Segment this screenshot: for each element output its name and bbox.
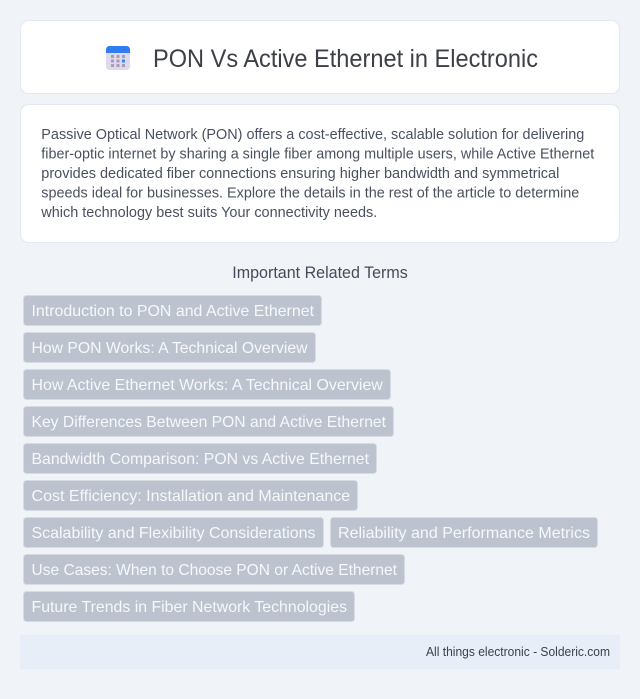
text block: introduction paragraph: Passive Optical Network (PON) offers a cost-effective, scalable solution for delivering bbox=[41, 127, 584, 143]
title: PON Vs Active Ethernet in Electronic bbox=[153, 45, 538, 73]
tag: future trends bbox=[24, 592, 354, 622]
tag: introduction bbox=[24, 296, 322, 326]
tag: cost efficiency bbox=[24, 480, 358, 510]
tag: bandwidth comparison: Bandwidth Comparison: PON vs Active Ethernet bbox=[32, 451, 370, 468]
tag: how PON works bbox=[24, 332, 316, 362]
tag: introduction: Introduction to PON and Active Ethernet bbox=[32, 303, 315, 320]
text block: introduction paragraph: speeds ideal for businesses. Explore the details in the rest of the article to determine bbox=[41, 185, 579, 201]
tag: how active ethernet works: How Active Ethernet Works: A Technical Overview bbox=[32, 377, 383, 394]
tag: scalability bbox=[24, 518, 324, 548]
panel: introduction bbox=[20, 104, 620, 242]
tag: reliability: Reliability and Performance Metrics bbox=[338, 525, 590, 542]
tag: reliability bbox=[330, 518, 598, 548]
text block: introduction paragraph bbox=[40, 127, 594, 221]
tag: use cases bbox=[24, 554, 404, 584]
tag: key differences: Key Differences Between PON and Active Ethernet bbox=[32, 414, 387, 431]
tag: how PON works: How PON Works: A Technical Overview bbox=[32, 340, 308, 357]
tag: scalability: Scalability and Flexibility Considerations bbox=[32, 525, 316, 542]
heading: important related terms: Important Related Terms bbox=[232, 264, 408, 282]
text block: introduction paragraph: fiber-optic internet by sharing a single fiber among multiple users, while Active Ethernet bbox=[41, 146, 594, 162]
tag list: related terms bbox=[24, 296, 598, 622]
panel: title card bbox=[20, 20, 620, 94]
tag: cost efficiency: Cost Efficiency: Installation and Maintenance bbox=[32, 488, 350, 505]
tag: bandwidth comparison bbox=[24, 444, 376, 474]
tag: future trends: Future Trends in Fiber Network Technologies bbox=[32, 599, 347, 616]
panel: footer bbox=[20, 635, 620, 669]
tag: use cases: Use Cases: When to Choose PON or Active Ethernet bbox=[32, 562, 398, 579]
tag: key differences bbox=[24, 406, 394, 436]
footer text: All things electronic - Solderic.com bbox=[426, 645, 610, 659]
icon: calendar grid bbox=[106, 46, 130, 70]
tag: how active ethernet works bbox=[24, 370, 390, 400]
text block: introduction paragraph: provides dedicated fiber connections ensuring higher bandwidth and symmetrical bbox=[41, 166, 559, 182]
text block: introduction paragraph: which technology best suits Your connectivity needs. bbox=[40, 205, 377, 221]
